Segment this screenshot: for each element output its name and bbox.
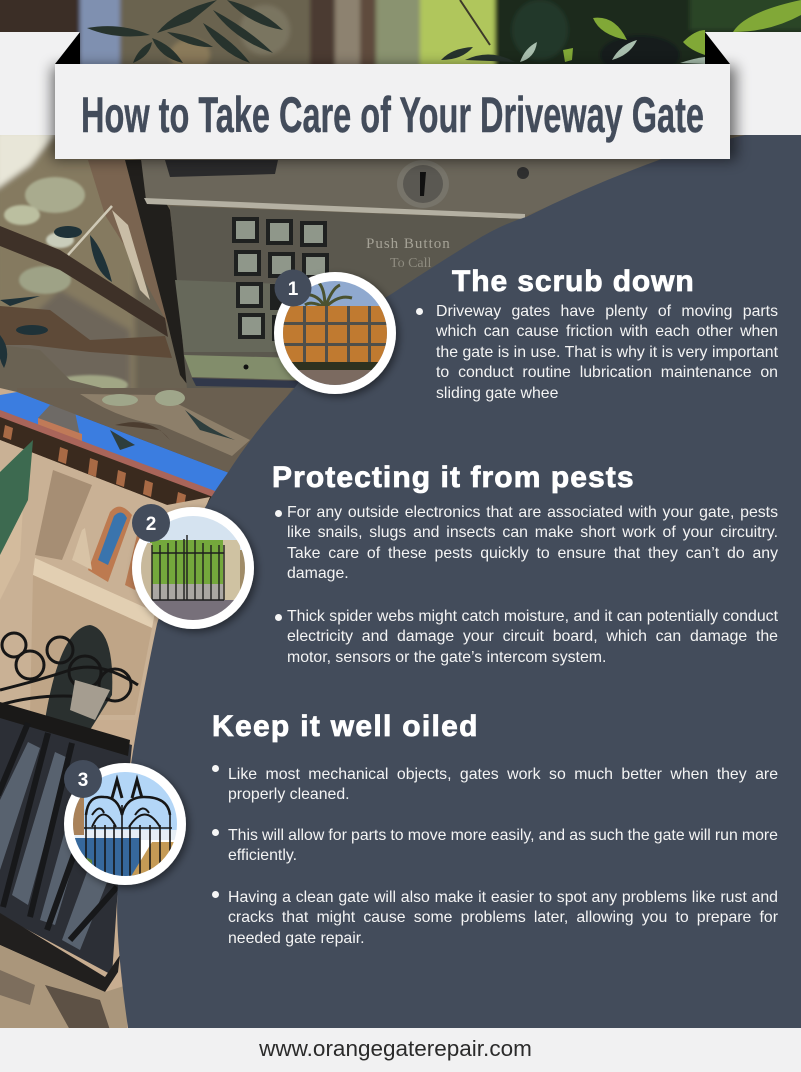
post bbox=[88, 160, 168, 325]
lock bbox=[397, 160, 449, 208]
photo: keypad on post: To Call bbox=[390, 256, 432, 271]
cypress bbox=[0, 440, 33, 555]
footer bar bbox=[0, 1028, 801, 1072]
text: oiled paragraph 3: needed gate repair. bbox=[228, 930, 365, 947]
number badge 1 bbox=[274, 270, 312, 306]
text: pests paragraph 2: electricity and damage your circuit board, which can damage the bbox=[287, 628, 778, 645]
text: oiled paragraph 1: properly cleaned. bbox=[228, 786, 350, 803]
windows bbox=[88, 507, 132, 582]
lower plate of keypad bbox=[170, 206, 525, 400]
footer url: www.orangegaterepair.com bbox=[259, 1036, 532, 1061]
circle image 2: iron gate with pillars bbox=[132, 507, 254, 629]
text: pests paragraph 1: like snails, slugs and insects can make short work of your circuitry. bbox=[287, 524, 778, 541]
number badge 3: 3 bbox=[78, 770, 88, 791]
photo: foliage along top bbox=[0, 0, 801, 140]
text: pests paragraph 2 bbox=[287, 608, 778, 666]
heading: keep it well oiled: Keep it well oiled bbox=[212, 710, 479, 743]
text: scrub down: to conduct routine lubrication maintenance on bbox=[436, 364, 778, 381]
text: oiled paragraph 2: efficiently. bbox=[228, 847, 297, 864]
text: oiled paragraph 1 bbox=[228, 766, 778, 803]
foliage clusters bbox=[4, 177, 128, 395]
dark panel bbox=[117, 135, 801, 1028]
text: pests paragraph 2: motor, sensors or the gate’s intercom system. bbox=[287, 649, 606, 666]
text: oiled paragraph 3: Having a clean gate will also make it easier to spot any problems like rust and bbox=[228, 889, 778, 906]
folded ribbon corners bbox=[55, 32, 730, 64]
left and right paper strips bbox=[0, 32, 801, 135]
text: scrub down: Driveway gates have plenty of moving parts bbox=[436, 303, 778, 320]
arched door bbox=[45, 625, 112, 730]
number badge 2 bbox=[132, 504, 170, 542]
text: pests paragraph 1: For any outside electronics that are associated with your gate, pests bbox=[287, 504, 778, 521]
text: scrub down: sliding gate whee bbox=[436, 385, 558, 402]
ribbon shadow bbox=[52, 66, 736, 160]
photo: keypad on post: Push Button bbox=[366, 236, 451, 252]
text: scrub down: the gate is in use. That is why it is very important bbox=[436, 344, 778, 361]
photo: mansion with iron gate bbox=[0, 388, 300, 1040]
text: scrub down bbox=[436, 303, 778, 402]
pediment bbox=[72, 528, 92, 570]
wall bbox=[0, 440, 210, 720]
number badge 3 bbox=[64, 760, 102, 798]
text: pests paragraph 2: Thick spider webs might catch moisture, and it can potentially conduct bbox=[287, 608, 778, 625]
number badge 1: 1 bbox=[288, 279, 299, 300]
bullet 2b bbox=[275, 614, 282, 621]
circle image 1: wooden gate bbox=[274, 272, 396, 394]
text: pests paragraph 1 bbox=[287, 504, 778, 582]
text: pests paragraph 1: damage. bbox=[287, 565, 349, 582]
bullet 3c bbox=[212, 891, 219, 898]
branches bbox=[0, 226, 168, 337]
photo: keypad on post bbox=[0, 130, 801, 405]
keypad brand plate bbox=[165, 160, 278, 177]
text: oiled paragraph 2 bbox=[228, 827, 778, 864]
bullet 2a bbox=[275, 510, 282, 517]
text: oiled paragraph 1: Like most mechanical objects, gates work so much better when they are bbox=[228, 766, 778, 783]
upper plate of keypad bbox=[141, 159, 660, 216]
bullet 3b bbox=[212, 829, 219, 836]
sky bbox=[0, 392, 232, 497]
gate body bbox=[0, 705, 132, 975]
text: oiled paragraph 3 bbox=[228, 889, 778, 947]
title banner bbox=[55, 64, 730, 159]
heading: protecting it from pests: Protecting it from pests bbox=[272, 461, 635, 494]
text: oiled paragraph 2: This will allow for parts to move more easily, and as such the gate will run more bbox=[228, 827, 778, 844]
bullet 1 bbox=[416, 308, 423, 315]
heading: the scrub down: The scrub down bbox=[452, 265, 695, 298]
eaves bbox=[0, 417, 213, 512]
text: pests paragraph 1: Take care of these pests quickly to ensure that they can’t do any bbox=[287, 545, 778, 562]
text: scrub down: which can cause friction with each other when bbox=[436, 323, 778, 340]
gate scrolls bbox=[0, 633, 138, 705]
roof tiles bbox=[0, 410, 215, 499]
circle image 3: ornate gate bbox=[64, 763, 186, 885]
number badge 2: 2 bbox=[146, 514, 156, 535]
driveway ground bbox=[0, 945, 127, 1030]
keypad keys bbox=[232, 217, 329, 341]
text: oiled paragraph 3: cracks that might cause some problems later, allowing you to prepare for bbox=[228, 909, 778, 926]
bullet 3a bbox=[212, 765, 219, 772]
photo 1 overlap: upper wedge over the mansion bbox=[17, 388, 293, 474]
